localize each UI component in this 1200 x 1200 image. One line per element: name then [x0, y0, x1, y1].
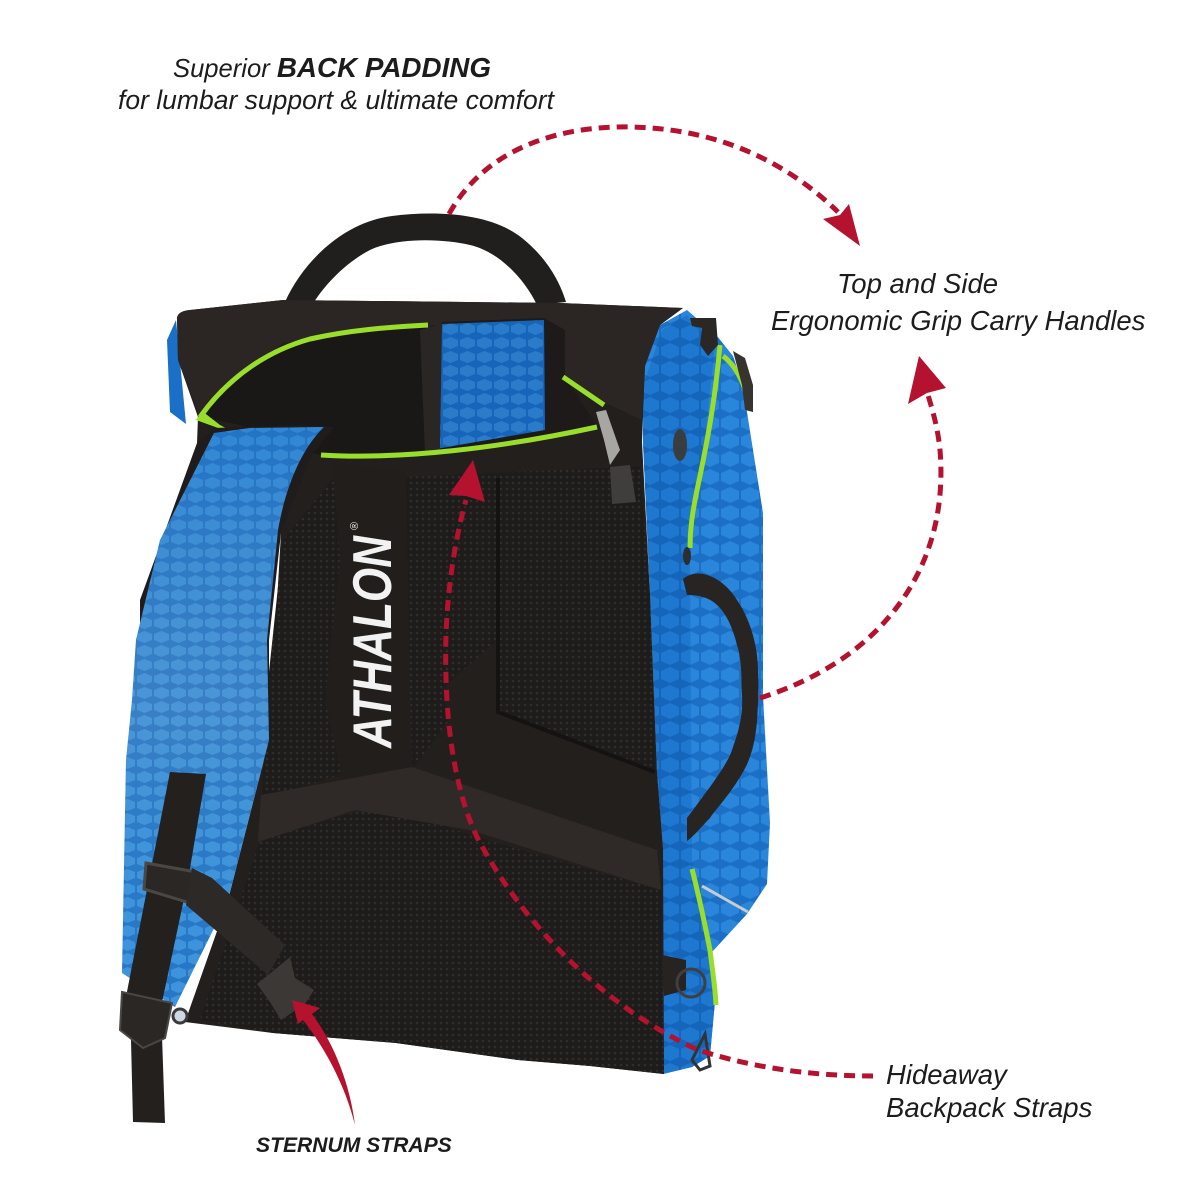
dark interior opening [202, 326, 442, 455]
Y shaped web band [258, 767, 661, 890]
flap strap [427, 318, 597, 452]
callout: carry handles: Top and Side [837, 268, 998, 299]
d-ring [677, 969, 705, 997]
lower ring [692, 1034, 710, 1070]
lower loop [662, 955, 686, 996]
left blue edge [167, 320, 186, 424]
small ring [173, 1009, 187, 1023]
lower mesh [200, 812, 664, 1074]
label: sternum straps: STERNUM STRAPS [256, 1134, 452, 1157]
upper slider [144, 863, 196, 903]
sternum buckle [257, 957, 314, 1020]
heading: back padding [118, 52, 556, 115]
lime zippers [200, 325, 746, 1005]
arrow: hideaway straps [446, 460, 873, 1076]
top buckle loop [690, 318, 718, 356]
main back body [177, 300, 683, 1074]
side panel: blue [643, 310, 770, 1074]
callout: hideaway straps: Backpack Straps [886, 1092, 1093, 1123]
logo column [325, 462, 412, 790]
heading: back padding: Superior BACK PADDING [173, 52, 491, 83]
callout: carry handles [771, 268, 1146, 336]
top carry handle [285, 214, 566, 305]
snaps [673, 429, 687, 461]
arrow: side handle to text [760, 356, 946, 698]
lime left zip lip [196, 411, 243, 437]
zipper tag [610, 465, 636, 504]
strap tone overlay [122, 427, 324, 1007]
side carry handle [683, 574, 758, 841]
callout: hideaway straps [886, 1059, 1093, 1123]
lower slider [120, 992, 172, 1048]
heading: back padding: for lumbar support & ultimate comfort [118, 85, 556, 115]
padded back mesh [406, 466, 655, 770]
sternum webbing [186, 868, 285, 975]
side zipper pull [733, 351, 753, 412]
flap upper tone [177, 300, 683, 420]
arrow: top handle to side text [449, 127, 860, 246]
shoulder strap blue [122, 427, 324, 1007]
arrow: sternum straps [292, 1000, 355, 1125]
callout: carry handles: Ergonomic Grip Carry Handles [771, 305, 1146, 336]
backpack illustration [120, 214, 770, 1123]
callout: hideaway straps: Hideaway [886, 1059, 1009, 1090]
front zipper pull [596, 410, 620, 465]
registered mark: ® [349, 522, 361, 530]
panel seam [498, 478, 655, 772]
shoulder strap black edge [140, 425, 334, 800]
webbing strap [124, 772, 206, 1123]
reflective stripe [702, 886, 748, 912]
brand logo: ATHALON [341, 535, 403, 750]
side panel: darker front strip [643, 315, 715, 1074]
